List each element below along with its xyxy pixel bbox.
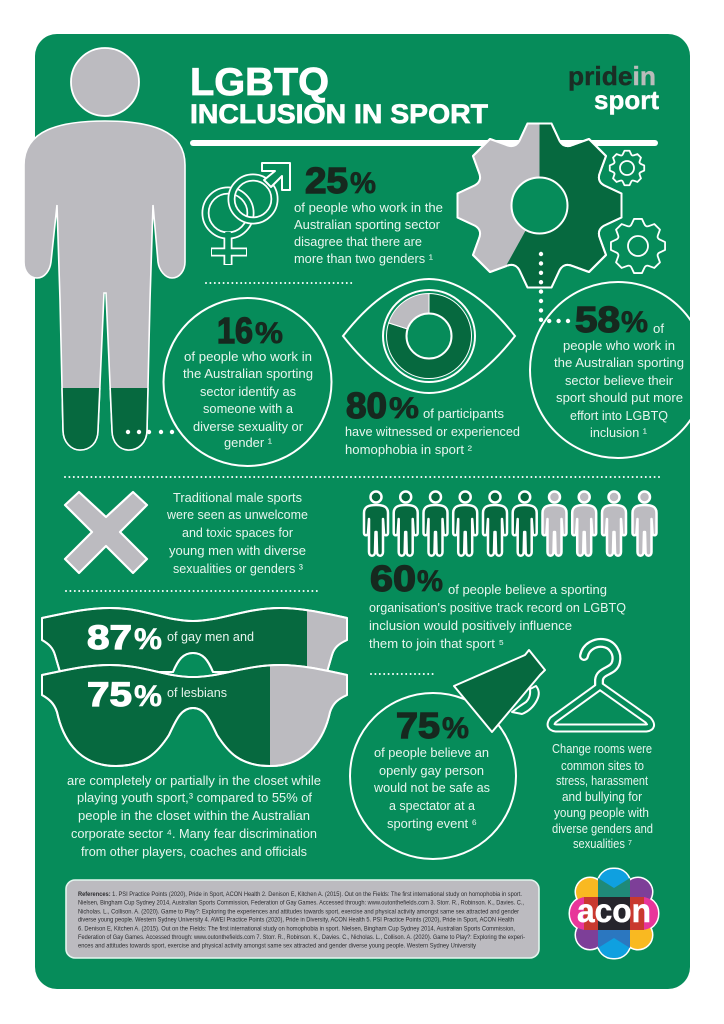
- references box: Federation of Gay Games. Accessed through: www.outonthefields.com 7. Storr. R., Robinson. K., Davies. C., Nicholas. L., Collison. A. (2020). Game to Play?: Exploring the experi-: [78, 934, 525, 941]
- text: change rooms: common sites to: [561, 759, 644, 773]
- panel: 75 percent circle: sporting event ⁶: [387, 816, 477, 831]
- title: LGBTQ: [190, 61, 329, 104]
- references box: Nicholas. L., Collison. A. (2020). Game to Play?: Exploring the experiences and attitudes towards sport, exercise and physical activity amongst same sex attracted and gender: [78, 908, 519, 915]
- text: in the closet: [67, 773, 321, 859]
- panel: 16 percent circle: diverse sexuality or: [193, 419, 304, 434]
- references box: diverse young people. Western Sydney University 4. AWEI Practice Points (2020), Pride in Diversity, ACON Health 5. PSI Practice Points (2020), Pride in Sport, ACON Health: [78, 917, 514, 924]
- stat: 87 percent of gay men: [87, 619, 254, 657]
- panel: 58 percent circle: the Australian sporting: [554, 355, 684, 370]
- icon row: ten people, six filled: [364, 492, 656, 556]
- text: in the closet: are completely or partially in the closet while: [67, 773, 321, 788]
- panel: 75 percent circle: openly gay person: [379, 763, 484, 778]
- panel: 58 percent circle: sector believe their: [565, 373, 674, 388]
- dotted connector from person to circle: [126, 430, 174, 434]
- text: in the closet: playing youth sport,³ compared to 55% of: [77, 790, 312, 805]
- stat: 25 percent: 25: [305, 160, 348, 201]
- panel: 16 percent circle: of people who work in: [184, 349, 312, 364]
- panel: 58 percent circle: [530, 282, 706, 458]
- panel: 58 percent circle: %: [621, 306, 648, 339]
- stat: 80 percent: %: [389, 392, 419, 425]
- icon: gender symbols: [206, 163, 290, 265]
- panel: 58 percent circle: 58: [575, 299, 620, 340]
- stat: 60 percent: of people believe a sporting: [448, 582, 607, 597]
- panel: 58 percent circle: inclusion ¹: [590, 425, 648, 440]
- text: in the closet: corporate sector ⁴. Many fear discrimination: [71, 826, 317, 841]
- panel: 16 percent circle: someone with a: [203, 401, 294, 416]
- panel: 75 percent circle: would not be safe as: [373, 780, 490, 795]
- stat: 87 percent of gay men: of gay men and: [167, 629, 254, 644]
- stat: 80 percent: of participants: [423, 406, 504, 421]
- icon: eye with donut chart 80 percent: [343, 279, 515, 393]
- text: traditional male sports: and toxic spaces for: [182, 525, 294, 540]
- title: [190, 61, 489, 129]
- stat: 60 percent: them to join that sport ⁵: [369, 636, 504, 651]
- panel: 16 percent circle: gender ¹: [224, 435, 273, 450]
- stat: 75 percent of lesbians: [87, 676, 227, 714]
- icon: small gears: [610, 151, 665, 273]
- references box: Nielsen, Bingham Cup Sydney 2014, Australian Sports Commission, Federation of Gay Games. Accessed through: www.outonthefields.com 3. Storr. R., Robinson. K., Davies. C.,: [78, 900, 524, 907]
- text: traditional male sports: Traditional male sports: [173, 490, 302, 505]
- panel: 75 percent circle: 75: [396, 705, 440, 746]
- references box: [66, 880, 539, 958]
- text: in the closet: people in the closet within the Australian: [78, 808, 310, 823]
- stat: 25 percent: [294, 160, 443, 266]
- text: traditional male sports: sexualities or genders ³: [173, 561, 304, 576]
- panel: 75 percent circle: [350, 693, 516, 859]
- stat: 75 percent of lesbians: %: [134, 680, 162, 713]
- stat: 60 percent: [369, 558, 626, 651]
- panel: 58 percent circle: sport should put more: [556, 390, 683, 405]
- panel: 16 percent circle: sector identify as: [200, 384, 296, 399]
- title: INCLUSION IN SPORT: [190, 99, 489, 129]
- icon: large gear 58 percent: [458, 124, 622, 288]
- icon: megaphone: [454, 650, 545, 732]
- text: traditional male sports: were seen as unwelcome: [166, 507, 308, 522]
- dotted connector from gear to circle: [541, 254, 568, 321]
- logo: acon: [570, 869, 658, 958]
- stat: 80 percent: homophobia in sport ²: [345, 442, 473, 457]
- panel: 75 percent circle: of people believe an: [374, 745, 489, 760]
- panel: 16 percent circle: [164, 298, 332, 466]
- text: change rooms: sexualities ⁷: [573, 837, 632, 851]
- logo: acon: acon: [577, 892, 651, 929]
- large person figure: [24, 48, 185, 450]
- logo: pride in sport: [568, 61, 659, 115]
- panel: 75 percent circle: %: [442, 712, 469, 745]
- panel: 58 percent circle: effort into LGBTQ: [570, 408, 668, 423]
- stat: 60 percent: %: [417, 565, 443, 598]
- text: change rooms: diverse genders and: [552, 822, 653, 836]
- stat: 25 percent: %: [350, 167, 376, 200]
- references box: References: 1. PSI Practice Points (2020), Pride in Sport, ACON Health 2. Denison E, Kitchen A. (2015). Out on the Fields: The first international study on homophobia in sport.: [78, 891, 522, 898]
- references box: ences and attitudes towards sport, exercise and physical activity amongst same sex attracted and gender diverse young people. Western Sydney University: [78, 943, 477, 950]
- stat: 80 percent: 80: [346, 385, 387, 426]
- text: traditional male sports: [166, 490, 308, 576]
- logo: pride in sport: pridein: [568, 61, 656, 91]
- panel: 75 percent circle: a spectator at a: [389, 798, 476, 813]
- icon: front glasses 75 percent: [42, 665, 347, 766]
- text: traditional male sports: young men with diverse: [169, 543, 306, 558]
- stat: 80 percent: have witnessed or experienced: [345, 424, 520, 439]
- panel: 16 percent circle: the Australian sporting: [183, 366, 313, 381]
- text: in the closet: from other players, coaches and officials: [81, 844, 307, 859]
- references box: 6. Denison E, Kitchen A. (2015). Out on the Fields: The first international study on homophobia in sport. Nielsen, Bingham Cup Sydney 2014, Australian Sports Commission,: [78, 925, 515, 932]
- icon: cross: [65, 492, 147, 573]
- person head: [71, 48, 139, 116]
- stat: 25 percent: of people who work in the: [294, 200, 443, 215]
- stat: 80 percent: [345, 385, 520, 457]
- logo: pride in sport: sport: [594, 85, 659, 115]
- text: change rooms: young people with: [554, 806, 649, 820]
- text: change rooms: Change rooms were: [552, 742, 652, 756]
- stat: 87 percent of gay men: 87: [87, 619, 132, 657]
- icon: back glasses 87 percent: [42, 608, 347, 672]
- stat: 75 percent of lesbians: 75: [87, 676, 132, 714]
- stat: 60 percent: inclusion would positively influence: [369, 618, 572, 633]
- panel: 58 percent circle: of: [653, 321, 664, 336]
- text: change rooms: [552, 742, 653, 851]
- panel: 16 percent circle: %: [255, 317, 283, 350]
- stat: 25 percent: disagree that there are: [294, 234, 422, 249]
- person body: [24, 121, 185, 450]
- stat: 75 percent of lesbians: of lesbians: [167, 685, 227, 700]
- stat: 25 percent: more than two genders ¹: [294, 251, 434, 266]
- person legs filled 16 percent: [61, 388, 149, 451]
- stat: 25 percent: Australian sporting sector: [294, 217, 441, 232]
- text: change rooms: and bullying for: [562, 790, 642, 804]
- icon: coat hanger: [551, 643, 651, 728]
- stat: 60 percent: 60: [370, 558, 416, 599]
- panel: 16 percent circle: 16: [217, 310, 253, 351]
- stat: 87 percent of gay men: %: [134, 623, 162, 656]
- text: change rooms: stress, harassment: [556, 774, 648, 788]
- panel: 58 percent circle: people who work in: [563, 338, 675, 353]
- stat: 60 percent: organisation's positive track record on LGBTQ: [369, 600, 626, 615]
